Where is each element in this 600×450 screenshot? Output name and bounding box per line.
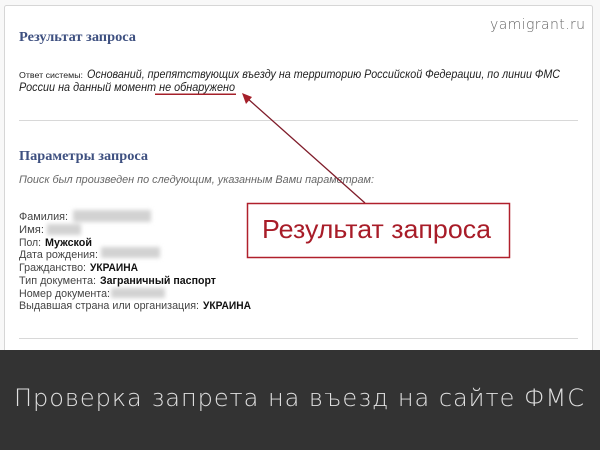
text block: parameter list: УКРАИНА bbox=[203, 300, 251, 312]
watermark: site name: yamigrant.ru bbox=[490, 17, 585, 33]
callout: query result: Результат запроса bbox=[262, 214, 492, 244]
text block: parameter list: Имя: bbox=[19, 224, 44, 236]
text block: parameter list: Выдавшая страна или организация: bbox=[19, 300, 199, 312]
text block: search note: Поиск был произведен по следующим, указанным Вами параметрам: bbox=[19, 174, 374, 186]
text block: parameter list: УКРАИНА bbox=[90, 262, 138, 274]
text block: system answer: Ответ системы: bbox=[19, 70, 83, 80]
panel: query result page bbox=[4, 6, 592, 366]
text block: parameter list: Заграничный паспорт bbox=[100, 275, 217, 287]
text block: parameter list: Номер документа: bbox=[19, 288, 110, 300]
text block: parameter list: Мужской bbox=[45, 237, 92, 249]
text block: system answer bbox=[19, 69, 561, 94]
text block: parameter list: Фамилия: bbox=[19, 211, 68, 223]
text block: parameter list bbox=[19, 211, 251, 312]
arrow: callout to result bbox=[242, 93, 365, 203]
callout: query result bbox=[248, 204, 510, 258]
text block: parameter list: Гражданство: bbox=[19, 262, 86, 274]
text block: parameter list: Тип документа: bbox=[19, 275, 96, 287]
heading: query parameters: Параметры запроса bbox=[19, 148, 148, 163]
text block: system answer: Оснований, препятствующих въезду на территорию Российской Федерации, по линии ФМС bbox=[87, 69, 561, 81]
redacted personal data bbox=[47, 210, 165, 298]
text block: parameter list: Пол: bbox=[19, 237, 41, 249]
text block: parameter list: Дата рождения: bbox=[19, 249, 98, 261]
title band: Проверка запрета на въезд на сайте ФМС bbox=[14, 384, 584, 412]
text block: system answer: России на данный момент не обнаружено bbox=[19, 82, 236, 94]
underline: not found bbox=[155, 94, 236, 95]
heading: query result: Результат запроса bbox=[19, 29, 136, 44]
title band bbox=[0, 350, 600, 450]
